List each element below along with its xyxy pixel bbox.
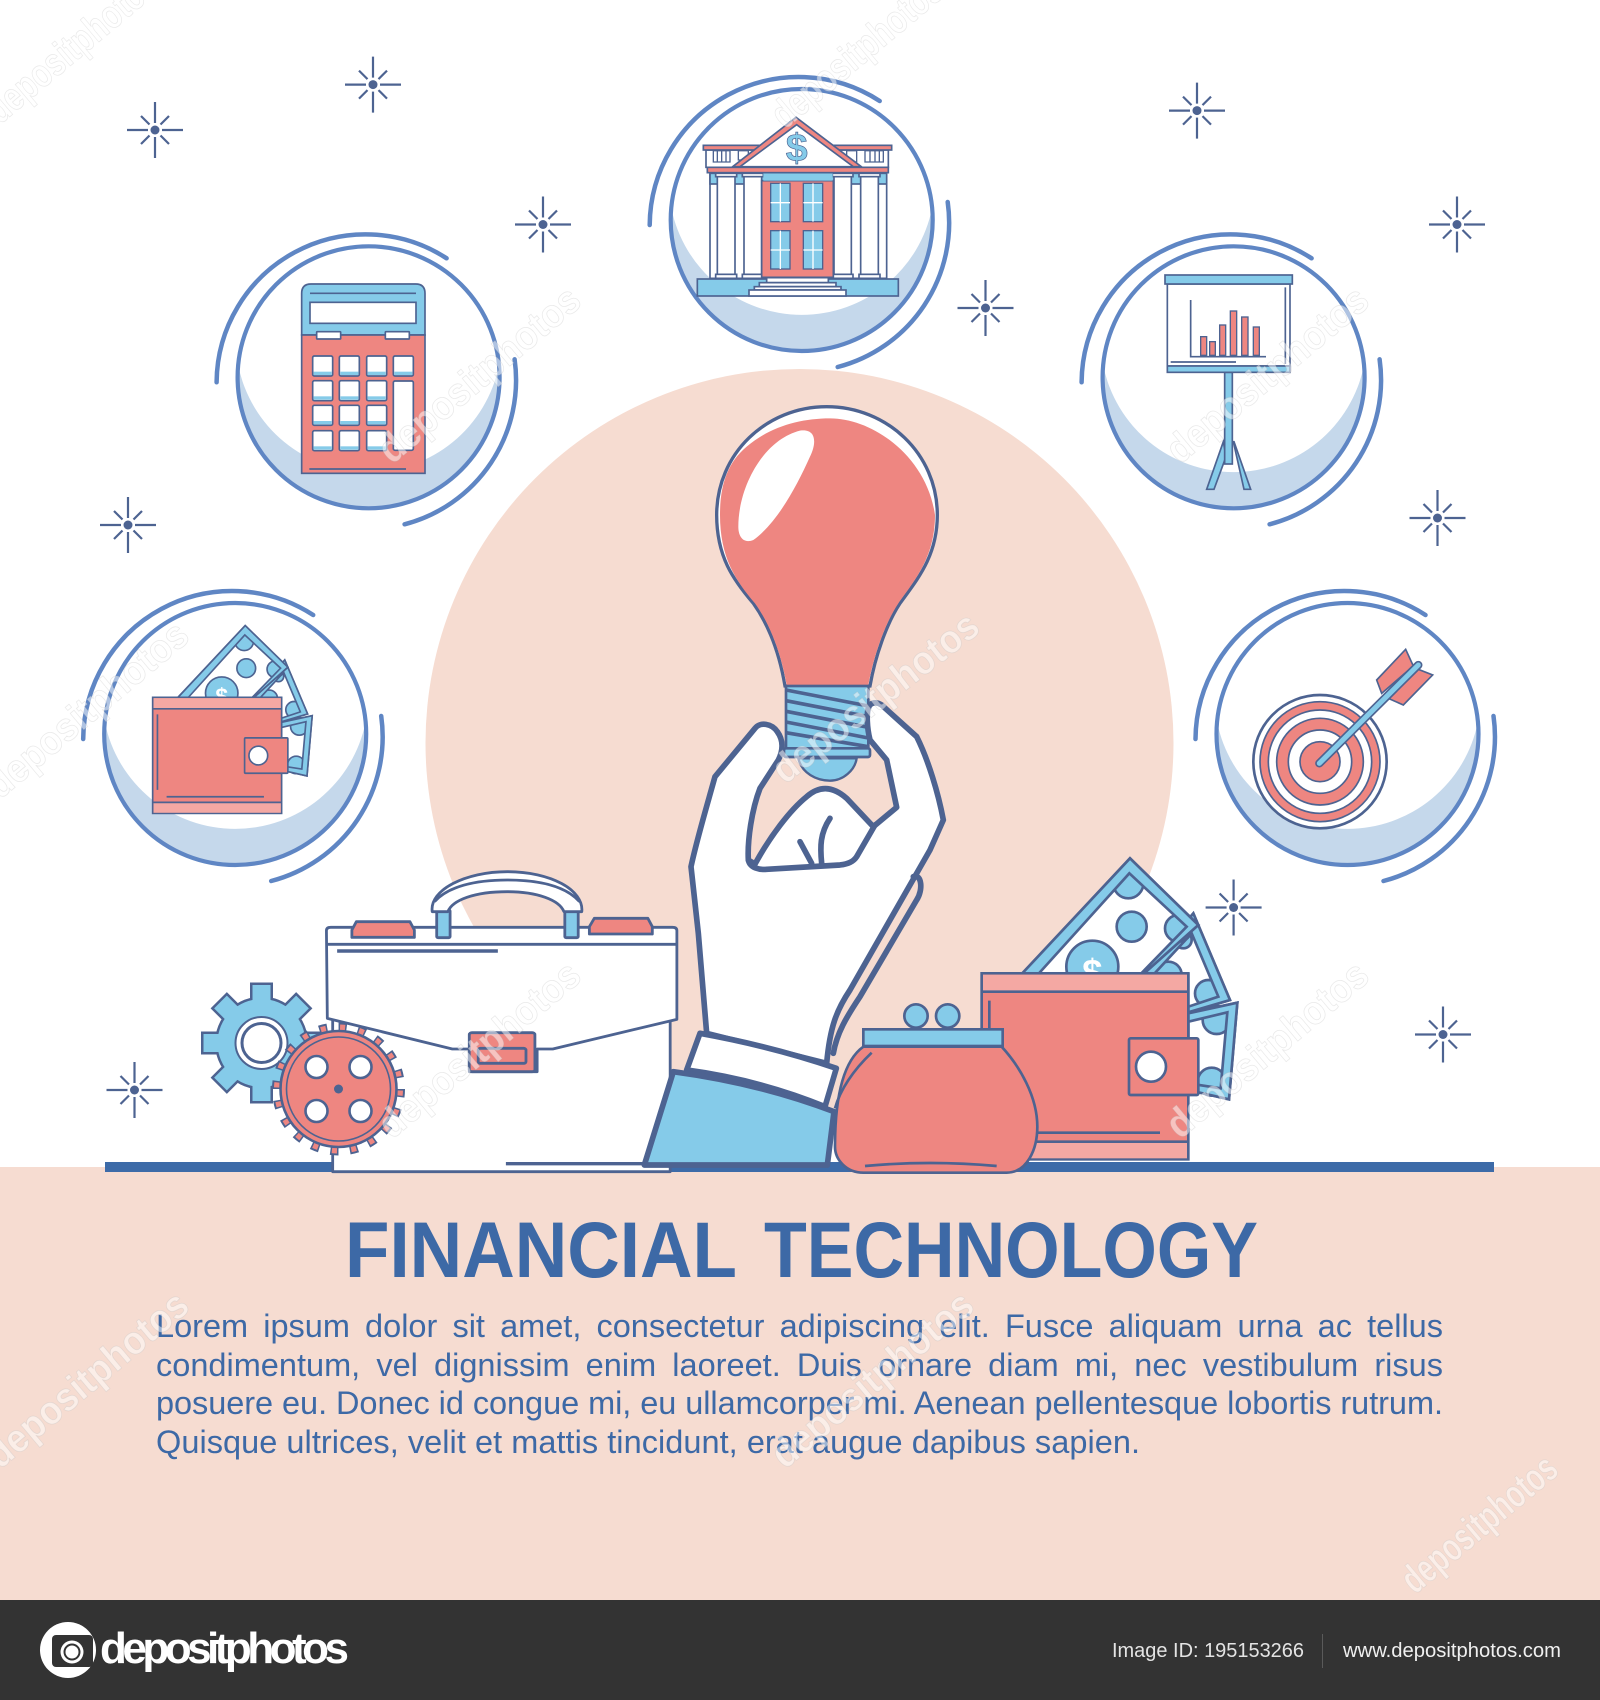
body text	[156, 1308, 1443, 1460]
title: FINANCIAL	[345, 1205, 737, 1294]
icon: bank in ring	[650, 77, 949, 367]
icon: bank in ring: $	[786, 126, 808, 170]
jacket sleeve	[644, 1072, 834, 1165]
watermarks: depositphotos	[370, 277, 589, 472]
watermarks: depositphotos	[1158, 277, 1377, 472]
icon: blue gear	[204, 985, 320, 1101]
footer bar	[0, 1600, 1600, 1700]
sparkle stars	[100, 57, 1485, 1118]
panel: bottom text band	[0, 1167, 1600, 1601]
watermarks: depositphotos	[370, 952, 589, 1147]
image id: Image ID: 195153266	[1112, 1640, 1304, 1662]
icon: presentation chart in ring	[1082, 234, 1381, 524]
coin purse	[835, 1004, 1037, 1173]
site url: www.depositphotos.com	[1342, 1640, 1561, 1662]
wallet with cash	[982, 858, 1237, 1159]
light bulb	[717, 407, 937, 781]
icon: wallet with cash in ring	[83, 591, 383, 881]
hand holding bulb	[644, 703, 943, 1165]
body text: Quisque ultrices, velit et mattis tincidunt, erat augue dapibus sapien.	[156, 1424, 1140, 1460]
briefcase	[326, 872, 677, 1172]
title	[345, 1205, 1258, 1294]
icon: calculator in ring	[217, 234, 516, 524]
icon: camera logo	[40, 1622, 96, 1678]
shirt cuff	[687, 1033, 836, 1107]
title: TECHNOLOGY	[764, 1205, 1258, 1294]
body text: Lorem ipsum dolor sit amet, consectetur adipiscing elit. Fusce aliquam urna ac tellus	[156, 1308, 1443, 1344]
icon: salmon gear	[278, 1028, 400, 1150]
background: pink circle	[426, 369, 1174, 1117]
watermarks: depositphotos	[763, 604, 988, 792]
footer logo text: depositphotos	[100, 1624, 349, 1673]
watermarks: depositphotos	[1158, 952, 1377, 1147]
body text: condimentum, vel dignissim enim laoreet. Duis ornare diam mi, nec vestibulum risus	[156, 1347, 1443, 1383]
ground line	[105, 1162, 1494, 1172]
body text: posuere eu. Donec id congue mi, eu ullamcorper mi. Aenean pellentesque lobortis rutrum.	[156, 1385, 1443, 1421]
icon: target with arrow in ring	[1196, 591, 1495, 881]
watermarks: depositphotos	[763, 1282, 982, 1477]
